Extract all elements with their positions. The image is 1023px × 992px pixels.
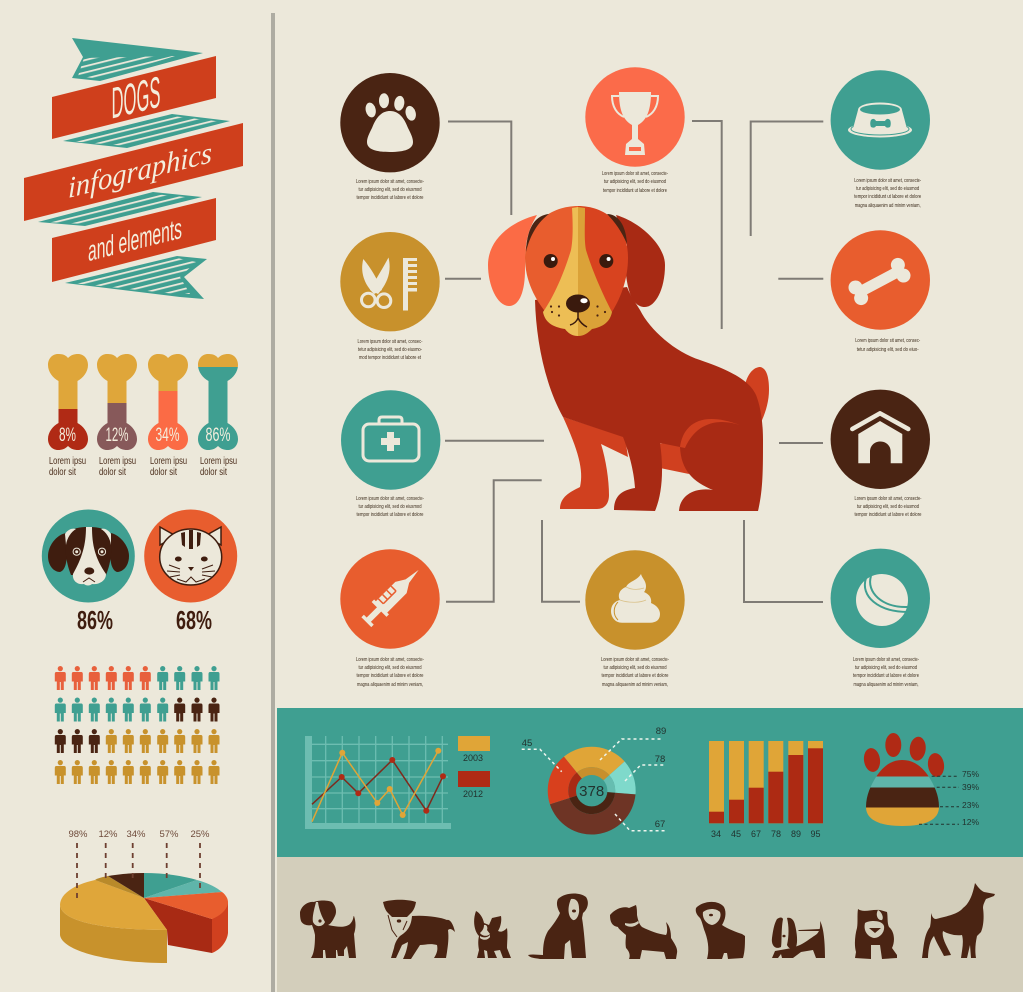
pie labels: 25% [190, 829, 210, 840]
caption: paw: Lorem ipsum dolor sit amet, consecte- [356, 179, 424, 185]
caption: bone [855, 338, 920, 353]
bone 34%: 34% [156, 425, 180, 446]
pie leader lines [77, 843, 200, 903]
pie labels [68, 829, 210, 840]
bone 12% [97, 354, 137, 450]
caption: poop: Lorem ipsum dolor sit amet, consecte- [601, 657, 669, 663]
dog: boston terrier [474, 911, 511, 958]
3D pie chart [60, 829, 228, 963]
line chart legend: 2012 [463, 789, 483, 799]
icon: ball [831, 549, 930, 648]
stacked bar chart [709, 741, 823, 839]
dog: scottish terrier [610, 905, 677, 959]
paw stacked chart [862, 733, 979, 827]
dog: bulldog [855, 909, 897, 959]
donut chart: 78 [655, 754, 665, 765]
stacked bar chart: 95 [810, 829, 821, 839]
caption: poop: magna aliquaenim ad minim veniam, [602, 682, 668, 688]
caption: poop: tempor incididunt ut labore et dolore [602, 673, 669, 679]
caption: ball: tempor incididunt ut labore et dolore [853, 673, 919, 679]
donut chart: 89 [656, 726, 666, 737]
caption: ball [853, 657, 919, 688]
caption: syringe [356, 657, 424, 688]
caption: syringe: magna aliquaenim ad minim veniam, [357, 682, 423, 688]
caption: dog house [854, 496, 922, 518]
pie labels: 98% [68, 829, 88, 840]
bone captions: dolor sit [99, 467, 126, 478]
connector lines [445, 121, 823, 602]
central dog illustration [488, 206, 769, 511]
bone 86%: 86% [206, 425, 231, 446]
icon: syringe [340, 549, 440, 649]
caption: paw: tempor incididunt ut labore et dolore [356, 195, 424, 201]
dog: shepherd puppy [383, 900, 455, 959]
icon: food bowl [831, 70, 930, 170]
caption: food bowl [854, 178, 921, 209]
stacked bar chart: 89 [791, 829, 801, 839]
icon: trophy [585, 67, 685, 167]
caption: dog house: Lorem ipsum dolor sit amet, consecte- [854, 496, 922, 502]
bone captions: Lorem ipsu [99, 456, 136, 467]
caption: dog house: tempor incididunt ut labore et dolore [854, 512, 922, 518]
icon: cat face 68% [144, 510, 237, 602]
caption: syringe: Lorem ipsum dolor sit amet, consecte- [356, 657, 424, 663]
caption: scissors: tetur adipisicing elit, sed do eiusmo- [358, 347, 422, 353]
caption: syringe: tur adipisicing elit, sed do eiusmod [358, 665, 422, 671]
icon: paw [340, 73, 440, 172]
stacked bar chart: 45 [731, 829, 741, 839]
icon: poop [585, 550, 685, 650]
caption: trophy: tempor incididunt ut labore et dolore [603, 188, 667, 194]
stacked bar chart: 78 [771, 829, 781, 839]
paw stacked chart: 75% [962, 769, 979, 779]
line chart [305, 736, 451, 829]
bone percentage charts [48, 354, 238, 478]
caption: ball: Lorem ipsum dolor sit amet, consecte- [853, 657, 919, 663]
donut chart: 45 [522, 738, 532, 749]
dog: sitting labrador [528, 893, 588, 959]
line chart legend: 2003 [463, 753, 483, 763]
bone 12%: 12% [106, 425, 129, 446]
caption: medical kit: tur adipisicing elit, sed do eiusmod [358, 504, 422, 510]
caption: medical kit [356, 496, 424, 518]
paw stacked chart: 12% [962, 817, 979, 827]
dog: beagle puppy [300, 900, 356, 958]
people pictogram chart [55, 666, 219, 784]
caption: medical kit: tempor incididunt ut labore et dolore [356, 512, 424, 518]
donut chart: 67 [655, 819, 665, 830]
panel: dog breeds band [277, 857, 1023, 992]
caption: bone: Lorem ipsum dolor sit amet, consec- [855, 338, 920, 344]
caption: scissors: mod tempor incididunt ut labore et [359, 355, 421, 361]
caption: food bowl: tempor incididunt ut labore et dolore [854, 194, 921, 200]
caption: paw [356, 179, 424, 201]
panel: teal charts band [277, 708, 1023, 857]
bone captions: dolor sit [200, 467, 227, 478]
ribbon title banner: DOGS [112, 68, 160, 128]
bone 8%: 8% [59, 425, 76, 446]
bone captions: Lorem ipsu [150, 456, 187, 467]
icon: bone [831, 230, 930, 330]
vertical divider [271, 13, 275, 992]
caption: food bowl: Lorem ipsum dolor sit amet, consecte- [854, 178, 921, 184]
caption: scissors: Lorem ipsum dolor sit amet, consec- [358, 339, 423, 345]
dog: pug [696, 902, 745, 959]
caption: food bowl: tur adipisicing elit, sed do eiusmod [856, 186, 919, 192]
stacked bar chart: 34 [711, 829, 721, 839]
caption: bone: tetur adipisicing elit, sed do eiuo- [857, 347, 919, 353]
caption: trophy: Lorem ipsum dolor sit amet, consecte- [602, 171, 668, 177]
caption: syringe: tempor incididunt ut labore et dolore [356, 673, 424, 679]
stacked bar chart: 67 [751, 829, 761, 839]
caption: poop: tur adipisicing elit, sed do eiusmod [604, 665, 667, 671]
caption: paw: tur adipisicing elit, sed do eiusmod [358, 187, 422, 193]
ribbon title banner [24, 38, 243, 299]
bone captions: Lorem ipsu [49, 456, 86, 467]
caption: poop [601, 657, 669, 688]
caption: trophy: tur adipisicing elit, sed do eiusmod [604, 179, 666, 185]
title: infographics: infographics [68, 135, 212, 205]
caption: trophy [602, 171, 668, 194]
stat: dog 86%: 86% [77, 605, 113, 635]
line chart legend [458, 736, 490, 799]
dog: doberman [922, 883, 995, 958]
bone 8% [48, 354, 88, 450]
caption: ball: tur adipisicing elit, sed do eiusmod [855, 665, 917, 671]
bone 34% [148, 354, 188, 450]
icon: dog face 86% [42, 510, 135, 602]
dog: basset hound [772, 918, 825, 958]
pie labels: 57% [159, 829, 179, 840]
donut chart: 378 [579, 783, 604, 800]
caption: food bowl: magna aliquaenim ad minim veniam, [855, 203, 921, 209]
pie labels: 34% [126, 829, 146, 840]
bone captions: dolor sit [49, 467, 76, 478]
caption: dog house: tur adipisicing elit, sed do eiusmod [857, 504, 919, 510]
icon: scissors and comb [340, 232, 440, 331]
title: and elements: and elements [88, 212, 182, 268]
bone captions: dolor sit [150, 467, 177, 478]
paw stacked chart: 23% [962, 800, 979, 810]
bone captions: Lorem ipsu [200, 456, 237, 467]
icon: dog house [831, 390, 930, 489]
icon: medical kit [341, 390, 440, 490]
stat: cat 68%: 68% [176, 605, 212, 635]
caption: scissors [358, 339, 423, 361]
caption: ball: magna aliquaenim ad minim veniam, [854, 682, 918, 688]
caption: medical kit: Lorem ipsum dolor sit amet, consecte- [356, 496, 424, 502]
bone 86% [198, 354, 238, 450]
pie labels: 12% [98, 829, 118, 840]
bone captions [49, 456, 237, 478]
donut chart [522, 726, 666, 834]
paw stacked chart: 39% [962, 782, 979, 792]
